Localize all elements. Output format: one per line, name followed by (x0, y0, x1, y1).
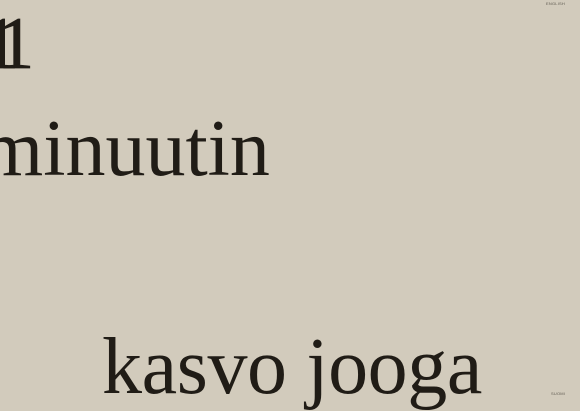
small label: top right: ENGLISH (546, 1, 565, 6)
heading: kasvo jooga: kasvo jooga (102, 323, 482, 411)
small label: bottom right: SUOMI (551, 391, 565, 396)
